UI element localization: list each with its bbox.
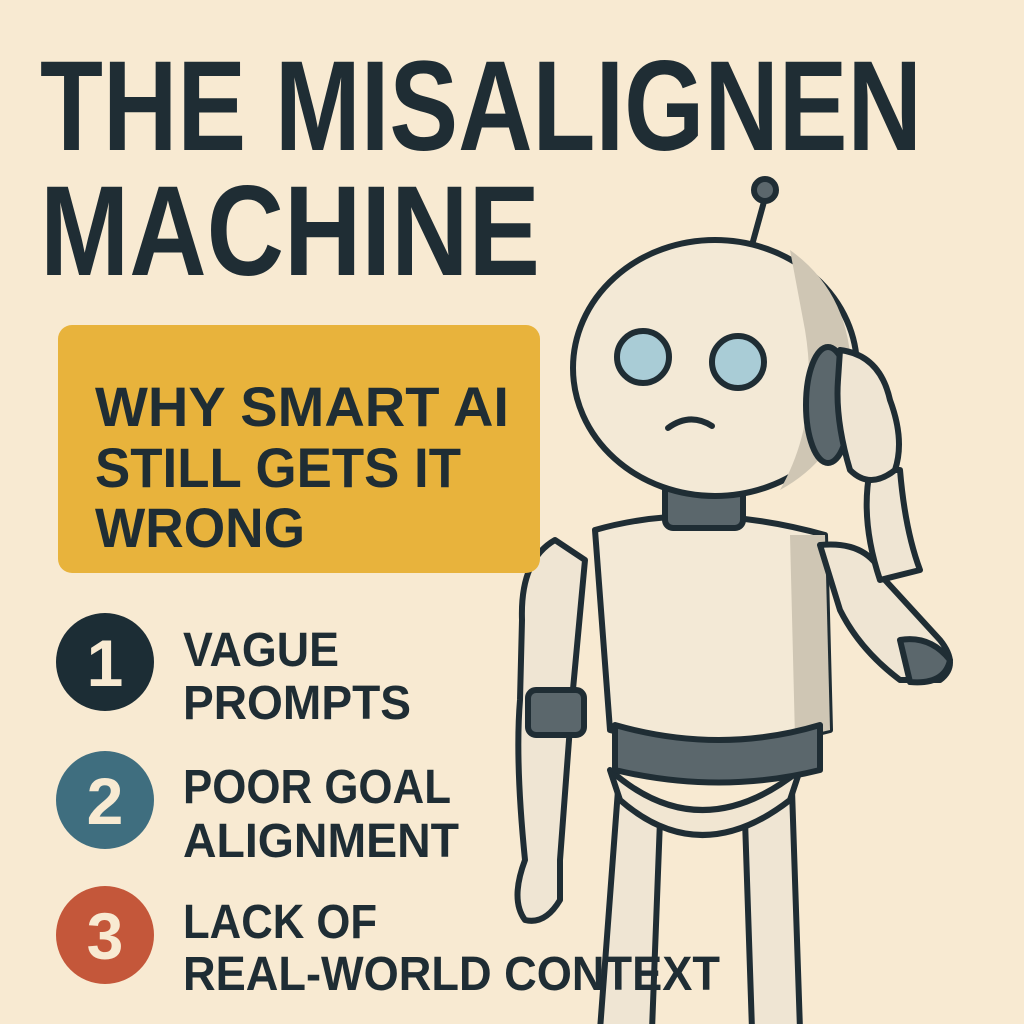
neck bbox=[665, 478, 743, 528]
list item 2: POOR GOAL bbox=[183, 761, 451, 814]
list item 3: REAL-WORLD CONTEXT bbox=[183, 948, 720, 1001]
torso bbox=[595, 516, 830, 745]
antenna bbox=[752, 198, 765, 245]
eyes bbox=[617, 331, 669, 383]
raised hand bbox=[838, 350, 899, 480]
legs bbox=[600, 790, 800, 1024]
head bbox=[573, 240, 857, 496]
title: MACHINE bbox=[40, 160, 540, 303]
callout: subtitle box: STILL GETS IT bbox=[95, 436, 461, 499]
left arm bbox=[518, 540, 585, 921]
waist band bbox=[615, 725, 820, 782]
callout: subtitle box bbox=[58, 325, 540, 573]
ear / headphone bbox=[806, 347, 850, 463]
illustration: robot bbox=[518, 179, 950, 1024]
list item 1: VAGUE bbox=[183, 624, 339, 677]
mouth bbox=[668, 419, 712, 428]
title bbox=[40, 35, 922, 303]
list item 2 bbox=[56, 751, 459, 868]
list item 1: 1 bbox=[87, 626, 123, 700]
list item 2: 2 bbox=[87, 764, 123, 838]
list item 1: PROMPTS bbox=[183, 677, 411, 730]
right arm bbox=[820, 544, 950, 680]
callout: subtitle box: WHY SMART AI bbox=[95, 375, 509, 438]
list item 3: 3 bbox=[87, 899, 123, 973]
list item 3: LACK OF bbox=[183, 896, 377, 949]
list item 3 bbox=[56, 886, 720, 1001]
list item 1 bbox=[56, 613, 411, 730]
list item 2: ALIGNMENT bbox=[183, 815, 459, 868]
callout: subtitle box: WRONG bbox=[95, 496, 305, 559]
